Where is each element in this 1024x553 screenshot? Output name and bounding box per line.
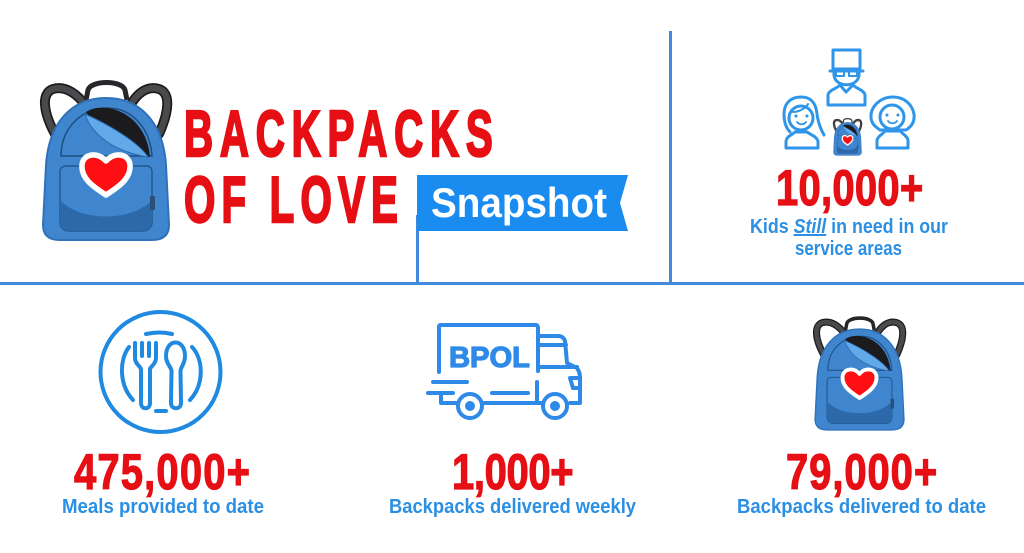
stat: weekly backpacks: 1,000+ xyxy=(452,444,574,500)
stat: kids in need: service areas xyxy=(795,238,902,260)
stat: backpacks to date: Backpacks delivered to date xyxy=(737,496,986,518)
stat: kids in need xyxy=(750,160,948,260)
title: OF LOVE xyxy=(184,164,398,236)
icon: delivery truck: BPOL xyxy=(449,342,530,374)
title: BACKPACKS xyxy=(184,98,493,170)
title xyxy=(184,98,493,236)
icon: delivery truck xyxy=(428,325,580,418)
icon: kids and teacher xyxy=(784,50,914,148)
stat: weekly backpacks: Backpacks delivered weekly xyxy=(389,496,637,518)
stat: backpacks to date: 79,000+ xyxy=(786,444,937,500)
stat: meals: 475,000+ xyxy=(74,444,250,500)
icon: backpack logo xyxy=(43,82,169,240)
stat: backpacks to date xyxy=(737,444,986,518)
icon: plate, fork and spoon xyxy=(100,312,220,432)
snapshot flag xyxy=(416,175,628,283)
divider lines xyxy=(0,31,1024,285)
icon: small backpack xyxy=(834,119,862,155)
icon: backpack xyxy=(815,318,904,430)
stat: kids in need: 10,000+ xyxy=(776,160,923,216)
snapshot flag: Snapshot xyxy=(431,179,607,226)
stat: kids in need: Kids Still in need in our xyxy=(750,216,948,238)
stat: weekly backpacks xyxy=(389,444,637,518)
stat: meals: Meals provided to date xyxy=(62,496,264,518)
stat: meals xyxy=(62,444,264,518)
